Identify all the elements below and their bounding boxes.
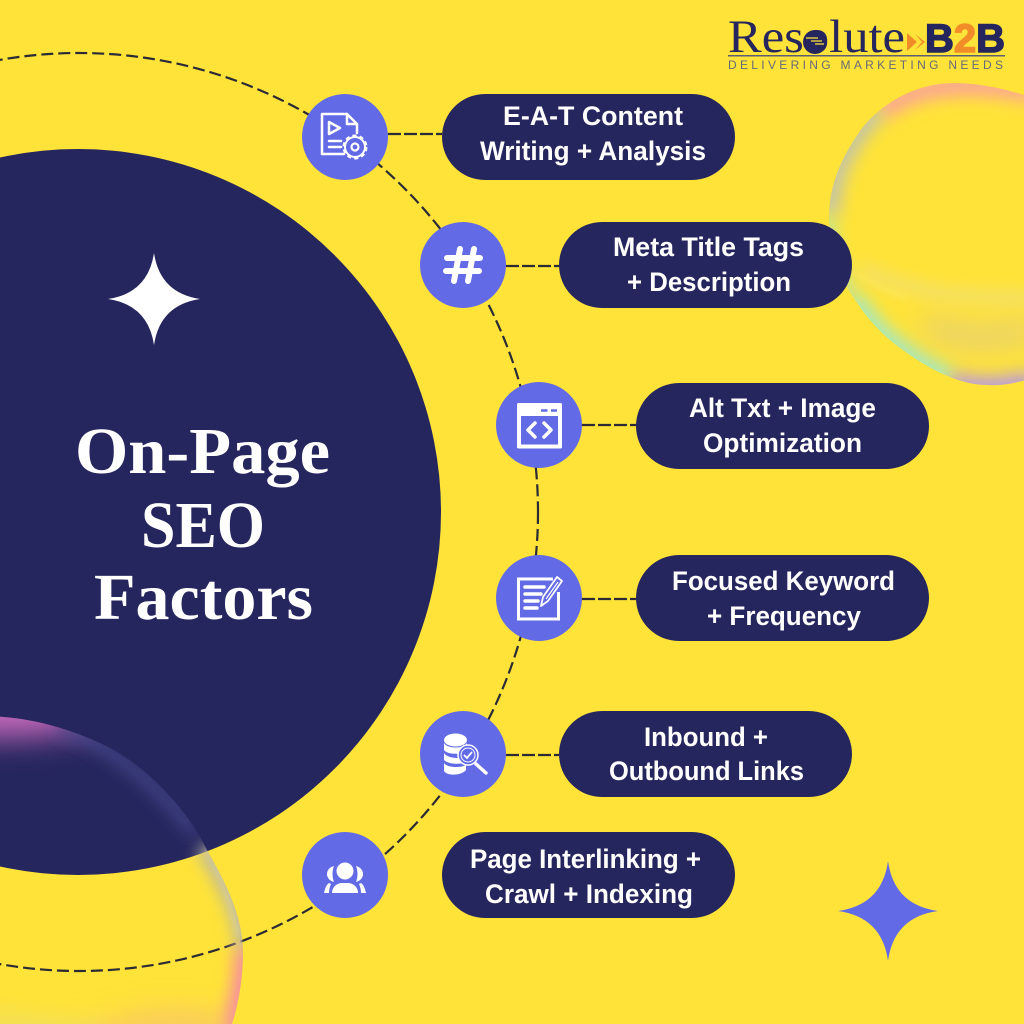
- logo: [728, 11, 1005, 72]
- pill: alt text: [636, 383, 929, 469]
- item 1: E-A-T content: [302, 94, 735, 180]
- pill: meta title: Meta Title Tags: [613, 232, 804, 262]
- pill: meta title: [559, 222, 852, 308]
- item 6: page interlinking: [302, 832, 735, 918]
- pill: focused keyword: + Frequency: [707, 601, 861, 631]
- icon: white sparkle star: [108, 253, 200, 345]
- icon: notepad with pencil: [496, 555, 582, 641]
- title: [75, 415, 330, 634]
- pill: inbound links: Outbound Links: [609, 756, 804, 786]
- pill: E-A-T content: [442, 94, 735, 180]
- title: SEO: [141, 489, 265, 562]
- pill: focused keyword: Focused Keyword: [672, 566, 895, 596]
- pill: inbound links: [559, 711, 852, 797]
- pill: page interlinking: [442, 832, 735, 918]
- title: On-Page: [75, 415, 330, 488]
- decorative bubble: bottom left: [0, 716, 243, 1024]
- icon: people group: [302, 832, 388, 918]
- logo: Resolute: [728, 11, 905, 63]
- pill: E-A-T content: Writing + Analysis: [480, 136, 706, 166]
- logo: DELIVERING MARKETING NEEDS: [728, 58, 1003, 72]
- pill: E-A-T content: E-A-T Content: [503, 101, 683, 131]
- pill: inbound links: Inbound +: [644, 722, 768, 752]
- pill: page interlinking: Crawl + Indexing: [485, 879, 693, 909]
- item 4: focused keyword: [496, 555, 929, 641]
- pill: focused keyword: [636, 555, 929, 641]
- item 2: meta title: [420, 222, 852, 308]
- icon: database with magnifier: [420, 711, 506, 797]
- icon: document with gear: [302, 94, 388, 180]
- pill: meta title: + Description: [627, 267, 791, 297]
- dashed arc connecting icons: [0, 53, 538, 971]
- panel: large navy circle: [0, 149, 441, 875]
- icon: code window: [496, 382, 582, 468]
- icon: hash: [420, 222, 506, 308]
- icon: blue sparkle star: [838, 861, 938, 961]
- decorative bubble: top right: [827, 85, 1024, 389]
- logo: B2B: [925, 17, 1005, 61]
- pill: alt text: Alt Txt + Image: [689, 393, 876, 423]
- item 5: inbound links: [420, 711, 852, 797]
- title: Factors: [94, 561, 313, 634]
- pill: alt text: Optimization: [703, 428, 862, 458]
- pill: page interlinking: Page Interlinking +: [470, 844, 701, 874]
- item 3: alt text: [496, 382, 929, 469]
